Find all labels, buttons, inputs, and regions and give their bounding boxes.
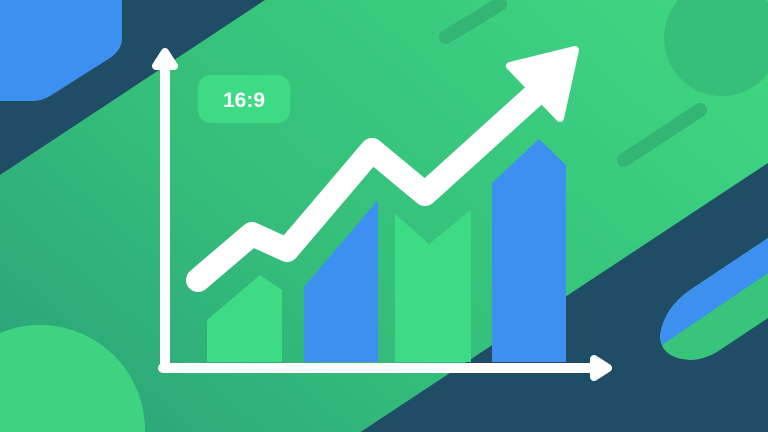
decorative diagonal lines (446, 4, 700, 160)
bars (207, 139, 566, 362)
trend arrow (198, 50, 575, 280)
badge 16:9 (198, 75, 290, 123)
bar 2 (304, 200, 378, 362)
bar 4 (492, 139, 566, 362)
bar 1 (207, 275, 282, 362)
green circle bottom-left (0, 325, 145, 432)
bar 3 (395, 210, 471, 362)
axes (156, 52, 608, 377)
pill bottom-right (660, 238, 768, 360)
blue shape top-left (0, 0, 122, 101)
badge 16:9: 16:9 (223, 89, 265, 112)
green circle top-right (664, 0, 768, 96)
